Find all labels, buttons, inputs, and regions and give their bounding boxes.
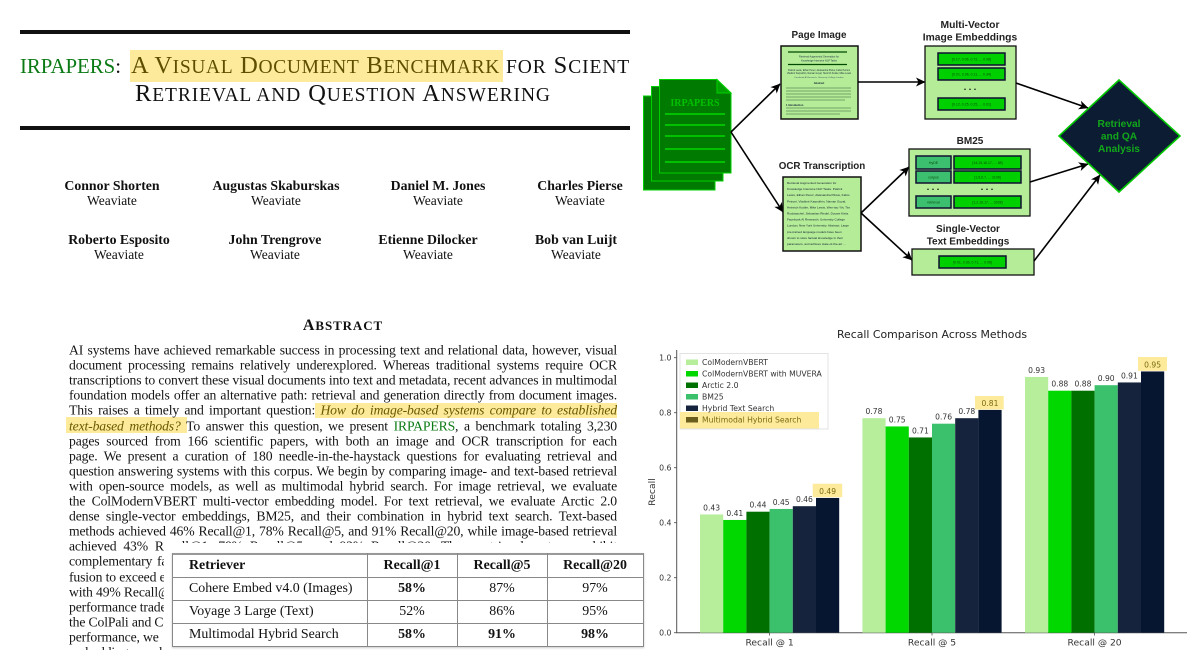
y axis: 0.4 (659, 518, 672, 528)
panel: authors: Weaviate (250, 247, 300, 262)
table: retriever recall results: Recall@20 (563, 558, 627, 573)
bars: recall at 1 (700, 484, 842, 633)
panel: pipeline diagram (643, 20, 1182, 276)
box: OCR transcription: parameters, and achieve state-of-the-art ... (787, 242, 846, 246)
bars: recall at 20: 0.95 (1144, 360, 1161, 370)
text block: abstract: fusion to exceed either (69, 569, 190, 584)
arrow: papers to OCR (731, 132, 783, 212)
y axis: 0.6 (659, 464, 672, 472)
legend (680, 354, 828, 429)
table: retriever recall results: 91% (488, 627, 516, 642)
bars: recall at 1: 0.46 (796, 495, 813, 504)
title line 1: IRPAPERS: (20, 55, 121, 78)
panel: authors: Roberto Esposito (68, 232, 170, 247)
text block: abstract: with open-source models, as well as multimodal hybrid search. For image retrieval, we evaluate (69, 479, 617, 494)
legend: ColModernVBERT (702, 358, 768, 367)
text block: abstract: AI systems have achieved remarkable success in processing text and relational data, however, visual (69, 343, 617, 358)
table: retriever recall results: Recall@5 (474, 558, 530, 573)
panel: authors: Weaviate (87, 193, 137, 208)
y axis: 0.2 (659, 574, 672, 582)
chart: recall comparison bar chart (647, 328, 1187, 648)
panel: authors: Weaviate (551, 247, 601, 262)
box: BM25 index: HyDE (929, 161, 939, 165)
box: page image: 1 Introduction (786, 103, 804, 107)
text block: abstract: This raises a timely and important question: How do image-based systems compare to established (69, 403, 617, 418)
table: retriever recall results: Multimodal Hybrid Search (189, 627, 339, 642)
arrow: papers to page image (731, 84, 780, 132)
table: retriever recall results: 52% (399, 604, 425, 619)
panel: authors: Weaviate (413, 193, 463, 208)
bars: recall at 5: 0.81 (982, 399, 999, 408)
box: OCR transcription: Retrieval Augmented Generation for (787, 181, 836, 185)
text block: abstract: text-based methods? To answer this question, we present IRPAPERS, a benchmark totaling 3,230 (69, 418, 617, 433)
text block: abstract (66, 343, 617, 656)
arrow: single-vector to analysis (1034, 175, 1100, 261)
panel: authors: John Trengrove (229, 232, 321, 247)
arrow: BM25 to analysis (1030, 164, 1088, 182)
box: page image: Abstract (814, 81, 824, 85)
title line 1 (20, 53, 630, 79)
text block: abstract: question answering systems with this corpus. We begin by comparing image- and text-based retrieval (69, 463, 617, 478)
box: single-vector embeddings: [0.01, 0.36, 0.71, ... 0.08] (953, 260, 992, 264)
box: BM25 index: corpus (928, 176, 939, 180)
x axis labels: Recall @ 20 (1068, 638, 1122, 648)
arrow: page image to multi-vector (858, 81, 925, 83)
box: OCR transcription: Rocktaschel, Sebastian Riedel, Douwe Kiela. (787, 212, 849, 216)
panel: authors: Etienne Dilocker (378, 232, 478, 247)
box: OCR transcription: Facebook AI Research; University College (787, 218, 845, 222)
table: retriever recall results: 58% (398, 581, 426, 596)
table: retriever recall results: 58% (398, 627, 426, 642)
panel: authors: Bob van Luijt (535, 232, 617, 247)
box: OCR transcription: London; New York University. Abstract: Large (787, 224, 849, 228)
table: retriever recall results: 95% (582, 604, 608, 619)
text block: abstract: the ColModernVBERT multi-vector embedding model. For text retrieval, we evaluate Arctic 2.0 (69, 494, 617, 509)
table: retriever recall results: Retriever (189, 558, 245, 573)
box: BM25 index: [1,2,16,17, ... 3028] (972, 200, 1003, 204)
arrow: multi-vector to analysis (1016, 83, 1088, 108)
bars: recall at 5: 0.76 (935, 413, 952, 422)
box: BM25 index: . . . (927, 182, 939, 192)
box: page image: Knowledge-Intensive NLP Tasks (801, 60, 838, 62)
legend: ColModernVBERT with MUVERA (702, 370, 823, 378)
box: BM25 index: [1,5,6,7, ... 3108] (974, 176, 1001, 180)
box: page image: Facebook AI Research; University College London (795, 76, 844, 79)
bars: recall at 5: 0.78 (958, 407, 975, 416)
diamond: retrieval and QA analysis: Analysis (1098, 144, 1140, 155)
table: retriever recall results: 87% (489, 581, 515, 596)
heading: multi-vector image embeddings: Multi-Vector (941, 20, 999, 31)
icon: paper stack (644, 80, 731, 190)
heading: BM25: BM25 (957, 136, 984, 147)
heading: page image: Page Image (792, 30, 847, 41)
text block: abstract: foundation models offer an alternative path: retrieval and generation directly from document images. (69, 388, 617, 403)
bars: recall at 1: 0.44 (750, 501, 767, 510)
panel: authors: Weaviate (555, 193, 605, 208)
box: single-vector embeddings (912, 249, 1034, 275)
text block: abstract: dense single-vector embeddings, BM25, and their combination in hybrid text search. Text-based (69, 509, 617, 524)
bars: recall at 1: 0.49 (819, 487, 836, 496)
box: multi-vector embeddings (925, 46, 1016, 119)
text block: abstract: pages sourced from 166 scientific papers, with both an image and OCR transcription for each (69, 433, 617, 448)
bars: recall at 5: 0.78 (866, 407, 883, 416)
panel: authors: Weaviate (251, 193, 301, 208)
panel: authors: Weaviate (403, 247, 453, 262)
x axis labels: Recall @ 1 (745, 638, 794, 648)
panel: authors (64, 178, 623, 262)
icon: paper stack: IRPAPERS (670, 98, 720, 109)
text block: abstract: complementary failures (69, 554, 197, 569)
text block: abstract: achieved 43% Recall@1, 78% Recall@5, and 93% Recall@20. These retrieval systems exhibit (69, 539, 617, 554)
bars: recall at 20: 0.88 (1075, 380, 1092, 389)
table: retriever recall results: 86% (489, 604, 515, 619)
bars: recall at 20: 0.90 (1098, 374, 1115, 383)
box: BM25 index: [14,15,16,17, ... 88] (972, 161, 1003, 165)
box: page image: Retrieval Augmented Generation for (799, 56, 839, 58)
bars: recall at 5: 0.75 (889, 416, 906, 424)
bars: recall at 20: 0.91 (1121, 372, 1138, 380)
bars: recall at 20: 0.88 (1051, 380, 1068, 389)
panel: authors: Augustas Skaburskas (213, 178, 339, 193)
text block: abstract: performance tradeoffs (69, 599, 187, 614)
legend: Multimodal Hybrid Search (702, 416, 802, 424)
arrow: OCR to single-vector (861, 213, 912, 260)
box: OCR transcription: shown to store factual knowledge in their (787, 236, 843, 240)
text block: abstract: performance, we (69, 630, 159, 645)
heading: single-vector text embeddings: Single-Vector (936, 224, 1000, 235)
y axis: 0.0 (659, 628, 672, 638)
x axis labels (745, 633, 1122, 648)
box: page image: Vladimir Karpukhin, Naman Goyal, Heinrich Kuttler, Mike Lewis (787, 72, 852, 75)
panel: authors: Daniel M. Jones (391, 178, 485, 193)
bars: recall at 1: 0.41 (726, 509, 743, 518)
text block: abstract: with 49% Recall@1 (69, 584, 177, 599)
title highlight (130, 50, 503, 82)
arrow: OCR to BM25 (861, 167, 909, 213)
table: retriever recall results (172, 553, 644, 647)
y axis: 1.0 (659, 354, 672, 362)
bars: recall at 20 (1025, 357, 1167, 633)
box: OCR transcription: Petroni, Vladimir Karpukhin, Naman Goyal, (787, 199, 846, 203)
diamond: retrieval and QA analysis: Retrieval (1097, 119, 1141, 130)
box: page image: Patrick Lewis, Ethan Perez, Aleksandra Piktus, Fabio Petroni (788, 69, 850, 72)
table: retriever recall results: Cohere Embed v4.0 (Images) (189, 581, 353, 596)
title line 2: RETRIEVAL AND QUESTION ANSWERING (135, 80, 551, 107)
text block: abstract: document processing remains relatively underexplored. Whereas traditional systems require OCR (69, 358, 617, 373)
bars: recall at 20: 0.93 (1028, 366, 1045, 375)
legend: Hybrid Text Search (702, 404, 774, 413)
y axis: 0.8 (659, 408, 672, 418)
text block: abstract: transcriptions to convert these visual documents into text and metadata, recent advances in multimodal (69, 373, 617, 388)
panel: authors: Charles Pierse (537, 178, 623, 193)
legend: BM25 (702, 392, 724, 402)
box: BM25 index: . . . (981, 182, 993, 192)
panel: authors: Weaviate (94, 247, 144, 262)
box: BM25 index: retrieval (927, 200, 940, 204)
diamond: retrieval and QA analysis: and QA (1101, 132, 1138, 142)
table: retriever recall results: Recall@1 (384, 558, 440, 573)
box: multi-vector embeddings: [0.17, 0.06, 0.72, ... 0.08] (952, 58, 991, 62)
bars: recall at 5 (862, 396, 1004, 633)
box: OCR transcription: pre-trained language models have been (787, 230, 842, 234)
bars: recall at 1: 0.43 (703, 504, 720, 512)
box: BM25 index (909, 149, 1030, 216)
heading: single-vector text embeddings: Text Embeddings (927, 236, 1010, 248)
table: retriever recall results: Voyage 3 Large (Text) (189, 604, 314, 619)
panel: paper title (20, 30, 630, 130)
text block: abstract: page. We present a curation of 180 needle-in-the-haystack questions for evaluating retrieval and (69, 448, 617, 463)
bars: recall at 5: 0.71 (912, 426, 929, 436)
x axis labels: Recall @ 5 (908, 638, 956, 648)
box: OCR transcription: Heinrich Kuttler, Mike Lewis, Wen-tau Yih, Tim (787, 205, 851, 209)
box: OCR transcription: Knowledge Intensive NLP Tasks. Patrick (787, 187, 843, 191)
box: page image (781, 46, 858, 119)
box: multi-vector embeddings: . . . (964, 82, 976, 92)
heading: multi-vector image embeddings: Image Embeddings (923, 32, 1017, 44)
box: multi-vector embeddings: [0.01, 0.96, 0.11, ... 0.34] (952, 72, 991, 76)
box: OCR transcription: Lewis, Ethan Perez, Aleksandra Piktus, Fabio (787, 193, 850, 197)
y axis: Recall (647, 478, 658, 506)
y axis (647, 350, 1187, 638)
table: retriever recall results: 97% (582, 581, 608, 596)
chart title: Recall Comparison Across Methods (837, 328, 1027, 341)
box: OCR transcription (783, 177, 861, 251)
panel: authors: Connor Shorten (64, 178, 160, 193)
table: retriever recall results: 98% (581, 627, 609, 642)
heading: OCR transcription: OCR Transcription (779, 161, 865, 172)
text block: abstract: methods achieved 46% Recall@1, 78% Recall@5, and 91% Recall@20, while image-based retrieval (69, 524, 617, 539)
box: multi-vector embeddings: [0.12, 0.25, 0.25, ... 0.01] (952, 102, 991, 106)
diamond: retrieval and QA analysis (1059, 80, 1180, 192)
bars: recall at 1: 0.45 (773, 498, 790, 507)
heading: abstract: ABSTRACT (303, 317, 383, 334)
legend: Arctic 2.0 (702, 381, 739, 390)
